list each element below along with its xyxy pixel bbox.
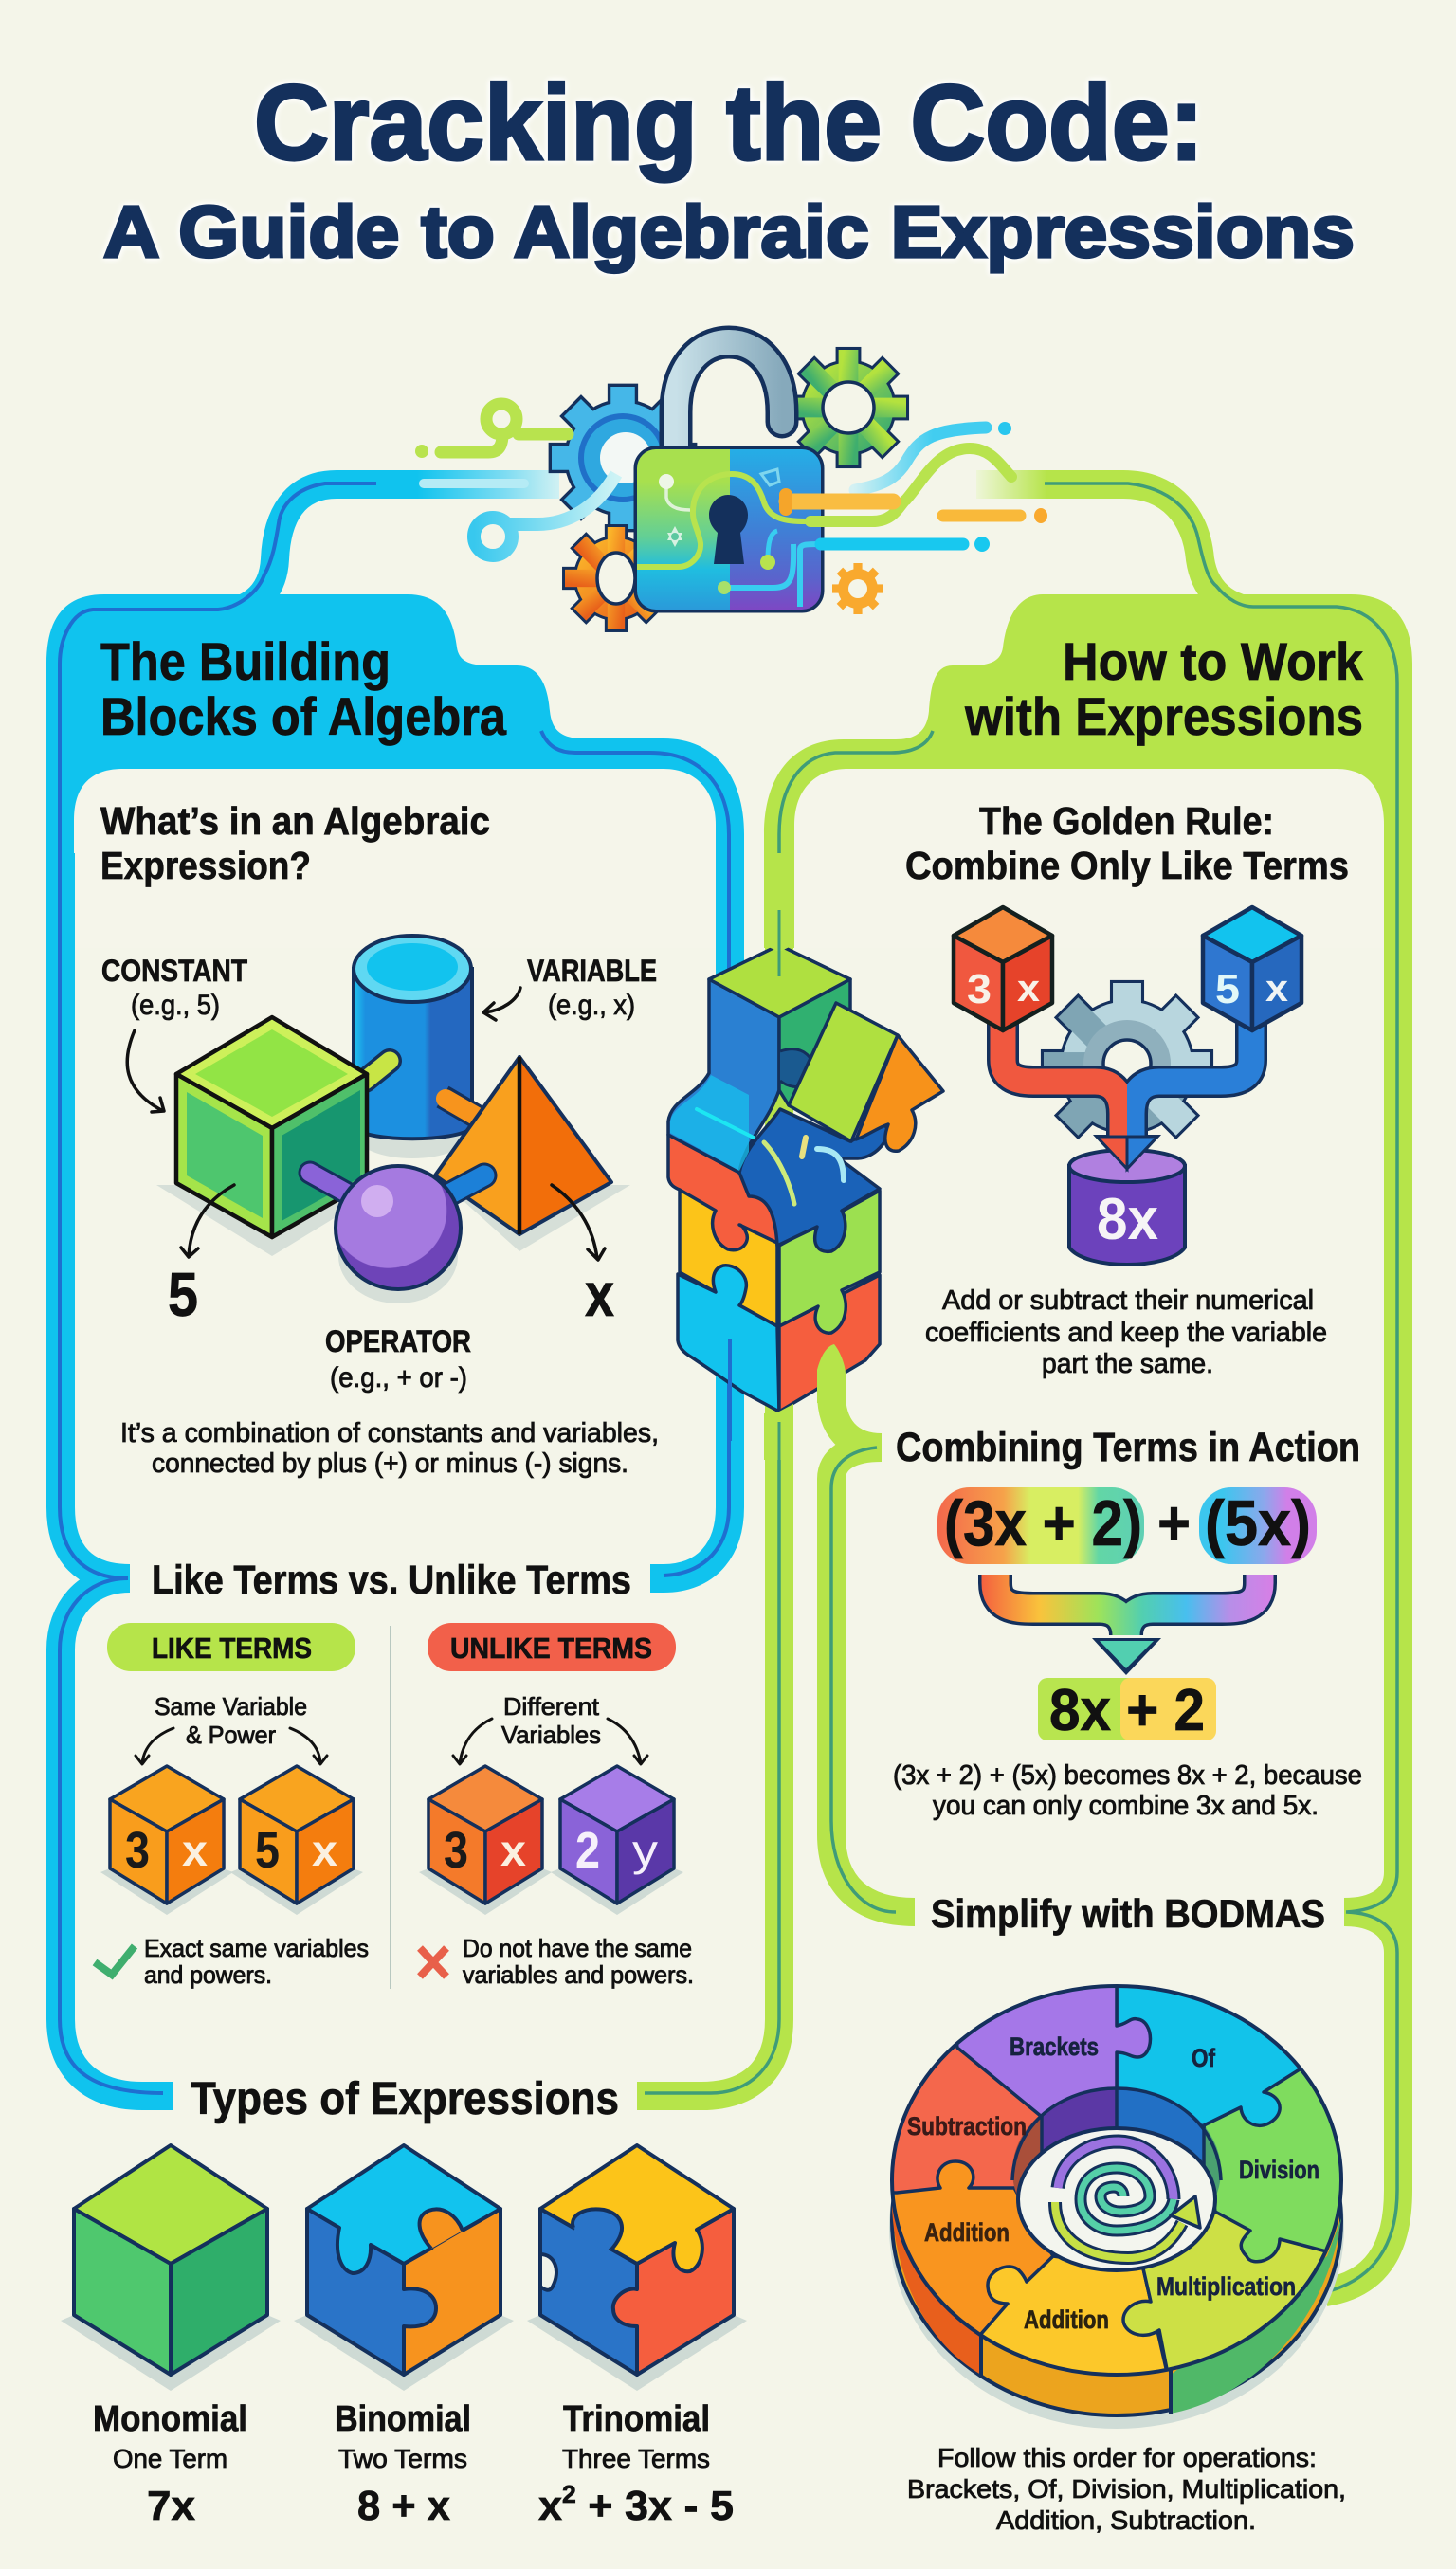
equation text: (3x + 2) (944, 1487, 1142, 1559)
text: different variables: Variables (501, 1721, 601, 1749)
shadows (419, 1868, 683, 1915)
chart: bodmas wheel (889, 1984, 1344, 2429)
lower pieces (668, 1135, 880, 1412)
text: bodmas explanation: Brackets, Of, Division, Multiplication, (907, 2474, 1346, 2504)
equation text (944, 1487, 1311, 1559)
icon: cube 3 orange-red: 3 (444, 1822, 468, 1879)
lock body (637, 449, 834, 610)
panel: like terms (95, 1623, 369, 1989)
text: unlike terms note: Do not have the same (463, 1934, 692, 1962)
upper blue piece (668, 945, 888, 1251)
panel: unlike terms (419, 1623, 694, 1989)
label: trinomial: x (538, 2483, 561, 2529)
wheel labels: Multiplication (1156, 2272, 1296, 2301)
heading: types of expressions: Types of Expressions (191, 2074, 619, 2124)
icon: unlocked padlock with gears and circuits (415, 342, 1047, 629)
heading: what's in an expression (100, 799, 490, 887)
purple rod fill (310, 1173, 353, 1196)
text: golden rule explanation (925, 1285, 1327, 1379)
label: letter x: x (585, 1260, 614, 1329)
well center (1018, 2128, 1215, 2270)
text: golden rule explanation: coefficients and keep the variable (925, 1318, 1327, 1348)
icon: sphere (336, 1166, 461, 1289)
icon: red cube: x (1017, 968, 1040, 1010)
blue wire left (474, 474, 616, 556)
text: bodmas explanation (907, 2443, 1346, 2535)
icon: trinomial cube (540, 2145, 734, 2375)
icon: cube 5: 5 (255, 1822, 280, 1879)
panel: right green frame (637, 483, 1412, 2292)
label: trinomial: 2 (562, 2480, 576, 2508)
right wires (786, 428, 1020, 544)
arrow head outline (1092, 1638, 1161, 1675)
panel: left blue frame (46, 479, 744, 2096)
icon: cube 3 orange-red (428, 1766, 542, 1904)
text: definition: It’s a combination of constants and variables, (120, 1418, 659, 1448)
wheel labels: Of (1192, 2044, 1216, 2072)
icon: cube constant (176, 1017, 367, 1237)
text: unlike terms note: variables and powers. (463, 1960, 694, 1989)
label: monomial (93, 2399, 247, 2529)
arrows (453, 1719, 647, 1764)
text: like terms note: Exact same variables (144, 1934, 369, 1962)
icon: result cylinder: 8x (1097, 1187, 1158, 1252)
spiral arrow head (1171, 2196, 1200, 2228)
segment: brackets (956, 1988, 1153, 2116)
heading: like terms vs unlike terms: Like Terms vs. Unlike Terms (152, 1558, 631, 1603)
wheel labels: Division (1239, 2156, 1320, 2184)
icon: cube 2y purple (560, 1766, 674, 1904)
icon: converge arrow fill (995, 1575, 1260, 1635)
heading: how to work (964, 631, 1364, 746)
icon: blue cube: x (1265, 968, 1288, 1010)
icon: green gear (791, 350, 906, 465)
wheel segments (894, 1988, 1339, 2373)
icon: binomial cube (307, 2145, 500, 2375)
divider (390, 1626, 391, 1989)
arrow head fill (1100, 1641, 1154, 1668)
chart: combine like terms diagram (954, 907, 1301, 1265)
heading: how to work: with Expressions (964, 686, 1363, 746)
green flow over cube (817, 1344, 846, 1403)
arrow tip over cylinder (1097, 1137, 1157, 1169)
label: number 5: 5 (168, 1260, 198, 1329)
lime rod (365, 1061, 390, 1081)
icon: cube 3 (110, 1766, 224, 1904)
icon: cylinder (354, 936, 472, 1139)
arrows (127, 988, 605, 1260)
pill: unlike terms: UNLIKE TERMS (450, 1631, 652, 1665)
label: monomial: 7x (147, 2483, 196, 2529)
red arrow (990, 1026, 1127, 1136)
arrow outlines (1003, 1014, 1251, 1142)
label: binomial (335, 2399, 471, 2529)
icon: blue cube (1203, 907, 1301, 1030)
spiral (1055, 2141, 1182, 2258)
icon: shackle (676, 342, 782, 451)
icon: monomial cube (74, 2145, 267, 2375)
blue rod (446, 1175, 484, 1196)
icon: small orange gear (832, 563, 883, 614)
wheel rim (892, 1986, 1341, 2375)
equation text: (5x) (1205, 1487, 1311, 1559)
well rim top (1012, 2088, 1221, 2180)
purple rod (310, 1173, 353, 1196)
text: different variables: Different (503, 1692, 600, 1721)
icon: cube 5: x (312, 1826, 337, 1875)
text: combining explanation: (3x + 2) + (5x) becomes 8x + 2, because (893, 1760, 1362, 1791)
icon: cube 5 (240, 1766, 354, 1904)
text: golden rule explanation: Add or subtract their numerical (942, 1285, 1314, 1316)
text: like terms note: and powers. (144, 1960, 272, 1989)
text: same variable: Same Variable (155, 1692, 307, 1721)
title (103, 64, 1355, 273)
wheel labels: Addition (924, 2218, 1010, 2247)
text: definition (120, 1418, 659, 1479)
label: trinomial: Trinomial (563, 2399, 710, 2439)
label: variable: VARIABLE (527, 954, 657, 988)
icon: red cube: 3 (967, 966, 992, 1012)
wheel labels (907, 2032, 1320, 2334)
heading: golden rule: The Golden Rule: (979, 799, 1274, 843)
text: golden rule explanation: part the same. (1042, 1349, 1213, 1379)
icon: cube 3: 3 (125, 1822, 150, 1879)
heading: building blocks: The Building (100, 631, 391, 691)
wheel side (892, 2027, 1341, 2415)
green wire left (441, 404, 568, 452)
text: definition: connected by plus (+) or minus (-) signs. (152, 1448, 628, 1479)
segment: addition orange (894, 2159, 1052, 2332)
label: variable: (e.g., x) (548, 990, 635, 1021)
icon: cube 2y purple: 2 (575, 1822, 600, 1879)
panel: types of expressions (61, 2145, 747, 2529)
pill: result: 8x + 2 (1049, 1678, 1205, 1743)
label: operator: (e.g., + or -) (330, 1362, 467, 1394)
text: same variable: & Power (186, 1721, 276, 1749)
segment: of (1119, 1988, 1301, 2127)
wheel labels: Addition (1024, 2305, 1109, 2334)
segment: addition yellow (980, 2256, 1165, 2373)
shadows (156, 1111, 630, 1303)
text: combining explanation (893, 1760, 1362, 1821)
wheel labels: Subtraction (907, 2112, 1027, 2141)
icon: blue gear (552, 387, 694, 529)
icon: cube 3: x (182, 1826, 208, 1875)
text: combining explanation: you can only combine 3x and 5x. (933, 1791, 1319, 1821)
icon: red cube (954, 907, 1052, 1030)
label: constant: CONSTANT (101, 954, 247, 988)
green dot left (415, 445, 428, 458)
label: operator (325, 1324, 471, 1394)
label: trinomial: Three Terms (562, 2444, 710, 2473)
chart: combining equation (937, 1487, 1317, 1743)
pill: 5x (1199, 1487, 1317, 1564)
lime rod fill (365, 1061, 390, 1081)
label: monomial: One Term (113, 2444, 228, 2473)
arrow head outline (1093, 1135, 1161, 1172)
flying piece (789, 1003, 943, 1151)
heading: what's in an expression: What’s in an Algebraic (100, 799, 490, 843)
shadows (61, 2315, 747, 2391)
heading: simplify with bodmas: Simplify with BODMAS (931, 1891, 1325, 1936)
icon: pyramid (435, 1057, 611, 1234)
text: unlike terms note (463, 1934, 694, 1989)
label: trinomial (538, 2399, 734, 2529)
title: Cracking the Code: (254, 64, 1204, 182)
equation text: + (1157, 1487, 1191, 1559)
icon: cube 3 orange-red: x (500, 1826, 526, 1875)
arrows (136, 1728, 327, 1764)
heading: golden rule: Combine Only Like Terms (905, 844, 1349, 887)
text: like terms note (144, 1934, 369, 1989)
icon: blue cube: 5 (1215, 966, 1240, 1012)
label: trinomial: + 3x - 5 (576, 2483, 734, 2529)
label: constant: (e.g., 5) (131, 990, 220, 1021)
blue arrow (1127, 1026, 1265, 1136)
label: variable (527, 954, 657, 1021)
icon: cube 2y purple: y (632, 1826, 658, 1875)
heading: golden rule (905, 799, 1349, 887)
heading: what's in an expression: Expression? (100, 844, 311, 887)
icon: keyhole (709, 495, 748, 564)
blue tab (780, 1049, 813, 1087)
well wall (1012, 2089, 1221, 2194)
label: constant (101, 954, 247, 1021)
icon: central puzzle cube (668, 853, 943, 1479)
text: same variable (155, 1692, 307, 1749)
light streaks (697, 1109, 844, 1204)
pill: like terms: LIKE TERMS (152, 1631, 312, 1665)
wheel shadow (889, 2027, 1344, 2429)
orange rod fill (446, 1099, 483, 1121)
chart: expression anatomy shapes (127, 936, 630, 1303)
wheel labels: Brackets (1010, 2032, 1099, 2061)
green inner line on cube (777, 949, 781, 976)
icon: check mark (95, 1946, 135, 1975)
blue inner line on cube (728, 1339, 732, 1441)
text: different variables (501, 1692, 601, 1749)
pill: 3x + 2 (937, 1487, 1144, 1564)
heading: how to work: How to Work (1063, 631, 1364, 691)
pill: like terms (107, 1623, 355, 1671)
icon: result cylinder (1069, 1150, 1185, 1265)
orange rod (443, 1097, 483, 1121)
segment: division (1205, 2070, 1339, 2264)
label: operator: OPERATOR (325, 1324, 471, 1358)
text: bodmas explanation: Addition, Subtraction. (996, 2505, 1256, 2535)
title: A Guide to Algebraic Expressions (103, 191, 1355, 273)
blue glow sweep (670, 1075, 749, 1171)
label: binomial: 8 + x (357, 2483, 451, 2529)
label: binomial: Binomial (335, 2399, 471, 2439)
segment: multiplication (1121, 2214, 1323, 2368)
icon: cross mark (420, 1948, 446, 1977)
text: bodmas explanation: Follow this order for operations: (937, 2443, 1317, 2472)
heading: combining terms: Combining Terms in Action (896, 1425, 1360, 1470)
label: binomial: Two Terms (338, 2444, 467, 2473)
pill: unlike terms (428, 1623, 676, 1671)
icon: converge arrow outline (995, 1575, 1260, 1635)
blue rod fill (446, 1175, 484, 1196)
sphere highlight (361, 1185, 393, 1217)
icon: silver gear (1044, 983, 1210, 1150)
heading: building blocks: Blocks of Algebra (100, 686, 507, 746)
green band over cube (764, 853, 793, 1460)
green line on band (777, 910, 781, 1479)
heading: building blocks (100, 631, 507, 746)
segment: subtraction (894, 2048, 1039, 2192)
label: monomial: Monomial (93, 2399, 247, 2439)
wire end dots (974, 422, 1047, 552)
shadows (100, 1868, 363, 1915)
icon: orange gear (565, 527, 667, 629)
